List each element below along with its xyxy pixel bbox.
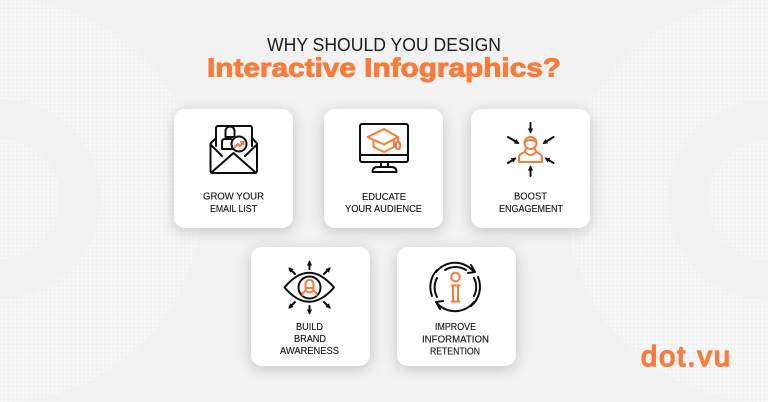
label bbox=[280, 322, 339, 357]
label: EMAIL LIST bbox=[210, 204, 257, 215]
panel: educate your audience bbox=[324, 109, 443, 228]
background pattern left bbox=[0, 0, 202, 402]
panel: improve information retention bbox=[397, 247, 516, 366]
icon: circular arrows with info symbol bbox=[430, 263, 480, 311]
icon: envelope with subscriber bbox=[210, 126, 257, 173]
icon: person with inward arrows bbox=[508, 123, 554, 176]
icon: eye with outward arrows bbox=[284, 262, 334, 313]
label bbox=[422, 322, 489, 358]
label: RETENTION bbox=[430, 346, 480, 358]
logo: dot.vu bbox=[641, 341, 730, 373]
label: ENGAGEMENT bbox=[499, 204, 563, 215]
label: INFORMATION bbox=[422, 334, 489, 346]
background pattern right bbox=[566, 0, 768, 402]
label bbox=[499, 192, 563, 215]
label: BUILD bbox=[296, 322, 323, 333]
panel: build brand awareness bbox=[251, 247, 370, 366]
panel: grow your email list bbox=[174, 109, 293, 228]
label: EDUCATE bbox=[362, 192, 406, 203]
icon: monitor with graduation cap bbox=[360, 124, 408, 172]
heading bbox=[207, 35, 561, 82]
label bbox=[345, 192, 422, 215]
heading line 2: Interactive Infographics? bbox=[207, 52, 561, 82]
label: BRAND bbox=[294, 334, 326, 345]
heading line 1: WHY SHOULD YOU DESIGN bbox=[267, 35, 501, 55]
label: AWARENESS bbox=[280, 346, 339, 357]
label: BOOST bbox=[514, 192, 547, 202]
label: IMPROVE bbox=[435, 322, 476, 333]
label: GROW YOUR bbox=[203, 192, 264, 202]
label bbox=[203, 192, 264, 215]
panel: boost engagement bbox=[471, 109, 590, 228]
label: YOUR AUDIENCE bbox=[345, 204, 422, 215]
